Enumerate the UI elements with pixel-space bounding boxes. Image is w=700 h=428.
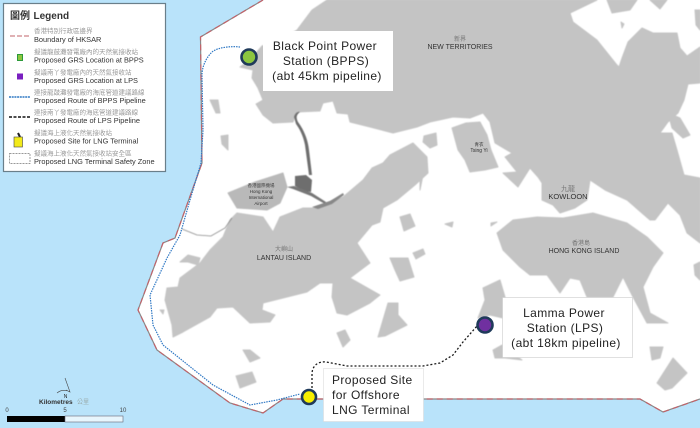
- land: Lantau Island: [165, 143, 428, 337]
- callout: LNG Terminal: [324, 368, 424, 422]
- legend item: safety zone: [10, 148, 155, 166]
- callout: Black Point Power Station: Station (BPPS): [283, 54, 369, 68]
- legend item: LPS route: 連接南丫發電廠的海底管道建議路線: [34, 108, 138, 116]
- zh: New Territories: 新界: [454, 35, 466, 43]
- label: Lantau: LANTAU ISLAND: [257, 255, 311, 262]
- legend item: GRS at BPPS: 擬議龍鼓灘發電廠內的天然氣接收站: [34, 47, 138, 56]
- legend item: GRS at LPS: Proposed GRS Location at LPS: [34, 76, 138, 85]
- BPPS pipeline route: [150, 47, 300, 405]
- zh: Kowloon: 九龍: [561, 184, 575, 193]
- scale bar: 0: [5, 408, 9, 414]
- zh: Airport: 香港國際機場: [248, 182, 275, 189]
- scale bar: 5: [63, 408, 67, 414]
- legend item: BPPS route: 連接龍鼓灘發電廠的海底管道建議路線: [34, 88, 145, 96]
- label: New Territories: NEW TERRITORIES: [427, 44, 493, 51]
- scale bar: 公里: [77, 399, 89, 406]
- legend item: GRS at BPPS: [18, 47, 144, 64]
- label: Tsing Yi: Tsing Yi: [470, 148, 488, 154]
- callout: Lamma Power Station: (abt 18km pipeline): [511, 336, 621, 350]
- legend item: boundary: 香港特別行政區邊界: [34, 26, 93, 35]
- legend heading: Legend: [34, 11, 69, 22]
- land: Tsing Yi: [452, 122, 498, 172]
- panel: legend: [4, 4, 166, 172]
- scale bar: Kilometres: [39, 399, 73, 406]
- callout: LNG Terminal: for Offshore: [332, 388, 400, 402]
- place names on the map: [249, 44, 619, 262]
- land: Lamma Island: [478, 280, 522, 360]
- zh: Lantau: 大嶼山: [275, 245, 293, 253]
- legend heading: 圖例: [10, 11, 30, 22]
- label: International: International: [249, 195, 273, 200]
- legend item: GRS at LPS: 擬議南丫發電廠內的天然氣接收站: [34, 68, 132, 76]
- HKSAR boundary line: [138, 0, 700, 413]
- land: Hong Kong Island: [497, 213, 668, 323]
- marker: Black Point Power Station: [242, 50, 256, 64]
- label: Hong Kong Island: HONG KONG ISLAND: [549, 248, 619, 255]
- land: Tai O headland: [180, 255, 200, 265]
- legend item: BPPS route: [9, 88, 146, 105]
- LPS pipeline route: [312, 326, 477, 388]
- marker: Lamma Power Station: [478, 318, 492, 332]
- north arrow: [57, 378, 70, 400]
- legend item: safety zone: Proposed LNG Terminal Safety Zone: [34, 157, 155, 166]
- legend item: GRS at LPS: [17, 68, 138, 85]
- label: Airport line: Airport: [254, 201, 268, 206]
- legend item: GRS at BPPS: Proposed GRS Location at BPPS: [34, 56, 144, 64]
- land: small islands: [160, 100, 700, 390]
- callout: Black Point Power Station: (abt 45km pipeline): [272, 69, 382, 83]
- callout: Black Point Power Station: Black Point Power: [273, 39, 377, 53]
- legend item: boundary: [10, 26, 101, 44]
- land masses: [160, 0, 700, 390]
- label: Kowloon: KOWLOON: [548, 192, 588, 201]
- airport platform and bridge corridor: [182, 112, 344, 236]
- legend item: boundary: Boundary of HKSAR: [34, 35, 101, 44]
- legend item: LNG site: [14, 128, 139, 147]
- land: New Territories and Kowloon: [240, 0, 700, 243]
- callout: Lamma Power Station: Station (LPS): [527, 321, 603, 335]
- callout: LNG Terminal: Proposed Site: [332, 373, 413, 387]
- land: airport platform: [228, 173, 287, 210]
- Chinese place names: [248, 35, 590, 253]
- legend item: LPS route: [9, 108, 140, 125]
- callout: Black Point Power Station: [263, 31, 393, 91]
- scale bar: 10: [120, 408, 127, 414]
- land: top right islands: [607, 0, 700, 138]
- callout: LNG Terminal: LNG Terminal: [332, 403, 410, 417]
- callout: Lamma Power Station: Lamma Power: [523, 306, 605, 320]
- legend item: safety zone: 擬議海上液化天然氣接收站安全區: [34, 148, 132, 158]
- legend item: LNG site: Proposed Site for LNG Terminal: [34, 136, 139, 146]
- scale bar: [5, 399, 127, 422]
- legend item: BPPS route: Proposed Route of BPPS Pipeline: [34, 96, 146, 105]
- legend item: LNG site: 擬議海上液化天然氣接收站: [34, 128, 112, 137]
- land: Ma Wan: [420, 133, 437, 190]
- zh: Tsing Yi: 青衣: [474, 141, 484, 148]
- zh: Hong Kong Island: 香港島: [572, 239, 590, 247]
- north arrow: N: [64, 394, 68, 400]
- marker: LNG terminal: [302, 390, 316, 404]
- label: Airport: Hong Kong: [250, 189, 273, 194]
- legend item: LPS route: Proposed Route of LPS Pipeline: [34, 116, 140, 125]
- callout: Lamma Power Station: [502, 298, 632, 358]
- HKSAR territory area: [138, 0, 700, 413]
